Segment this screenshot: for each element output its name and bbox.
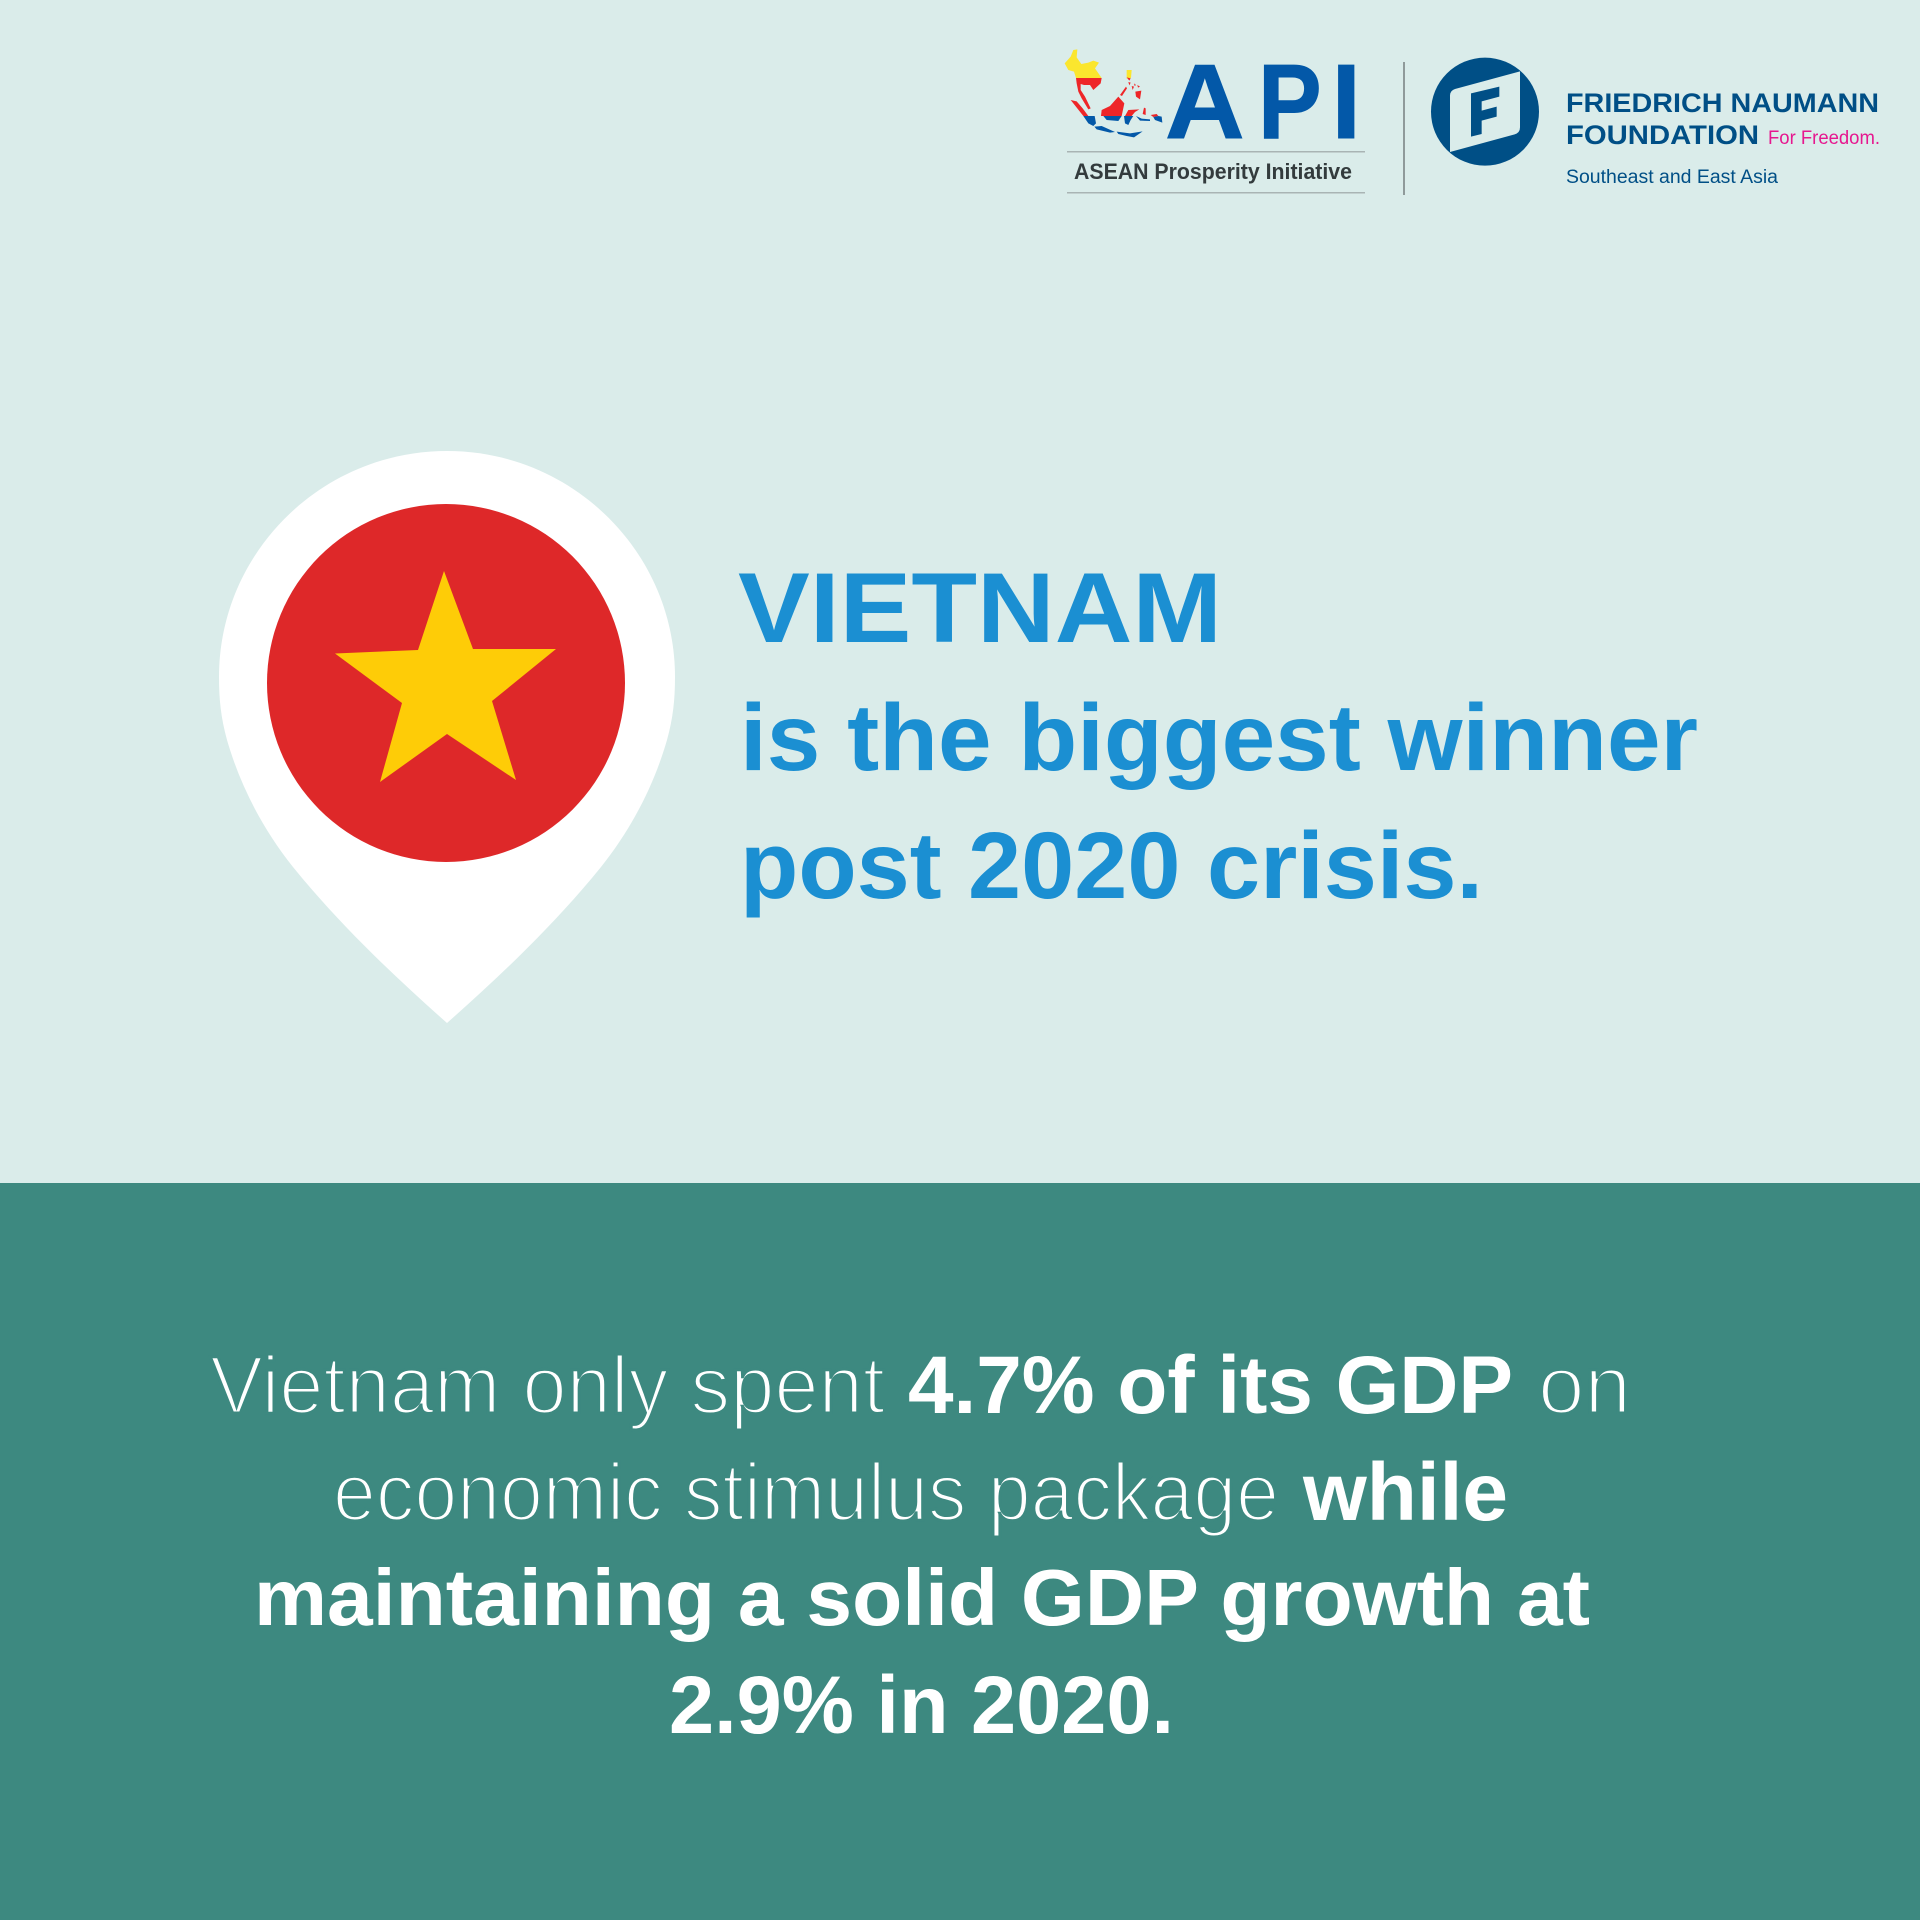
panel: teal summary band [0,1183,1920,1920]
logo: ASEAN Prosperity Initiative [1065,42,1365,194]
summary text: economic stimulus package [333,1447,1279,1538]
wordmark: API [1165,42,1361,161]
wordmark: API: I [1332,43,1361,161]
icon: map pin with Vietnam flag [219,451,675,1023]
summary text: Vietnam only spent [210,1340,885,1431]
headline: is the biggest winner [740,685,1698,791]
wordmark: API: P [1258,43,1322,161]
foundation name line 2: FOUNDATION [1566,120,1759,150]
summary text: on [1538,1340,1631,1431]
foundation name line 1: FRIEDRICH NAUMANN [1566,88,1879,118]
slogan: For Freedom. [1768,128,1880,149]
summary text: maintaining a solid GDP growth at [254,1553,1590,1642]
summary text: while [1302,1447,1508,1538]
icon: FNF circle [1431,58,1539,166]
summary text [210,1340,1631,1751]
logo: Friedrich Naumann Foundation [1431,58,1880,188]
headline: VIETNAM [738,552,1222,663]
summary text: 4.7% of its GDP [908,1340,1513,1431]
headline [738,552,1698,919]
summary text: 2.9% in 2020. [669,1660,1174,1751]
icon: ASEAN map [1065,49,1162,137]
region label: Southeast and East Asia [1566,167,1778,188]
headline: post 2020 crisis. [740,813,1483,919]
wordmark: API: A [1165,42,1245,161]
logo tagline: ASEAN Prosperity Initiative [1074,159,1352,184]
